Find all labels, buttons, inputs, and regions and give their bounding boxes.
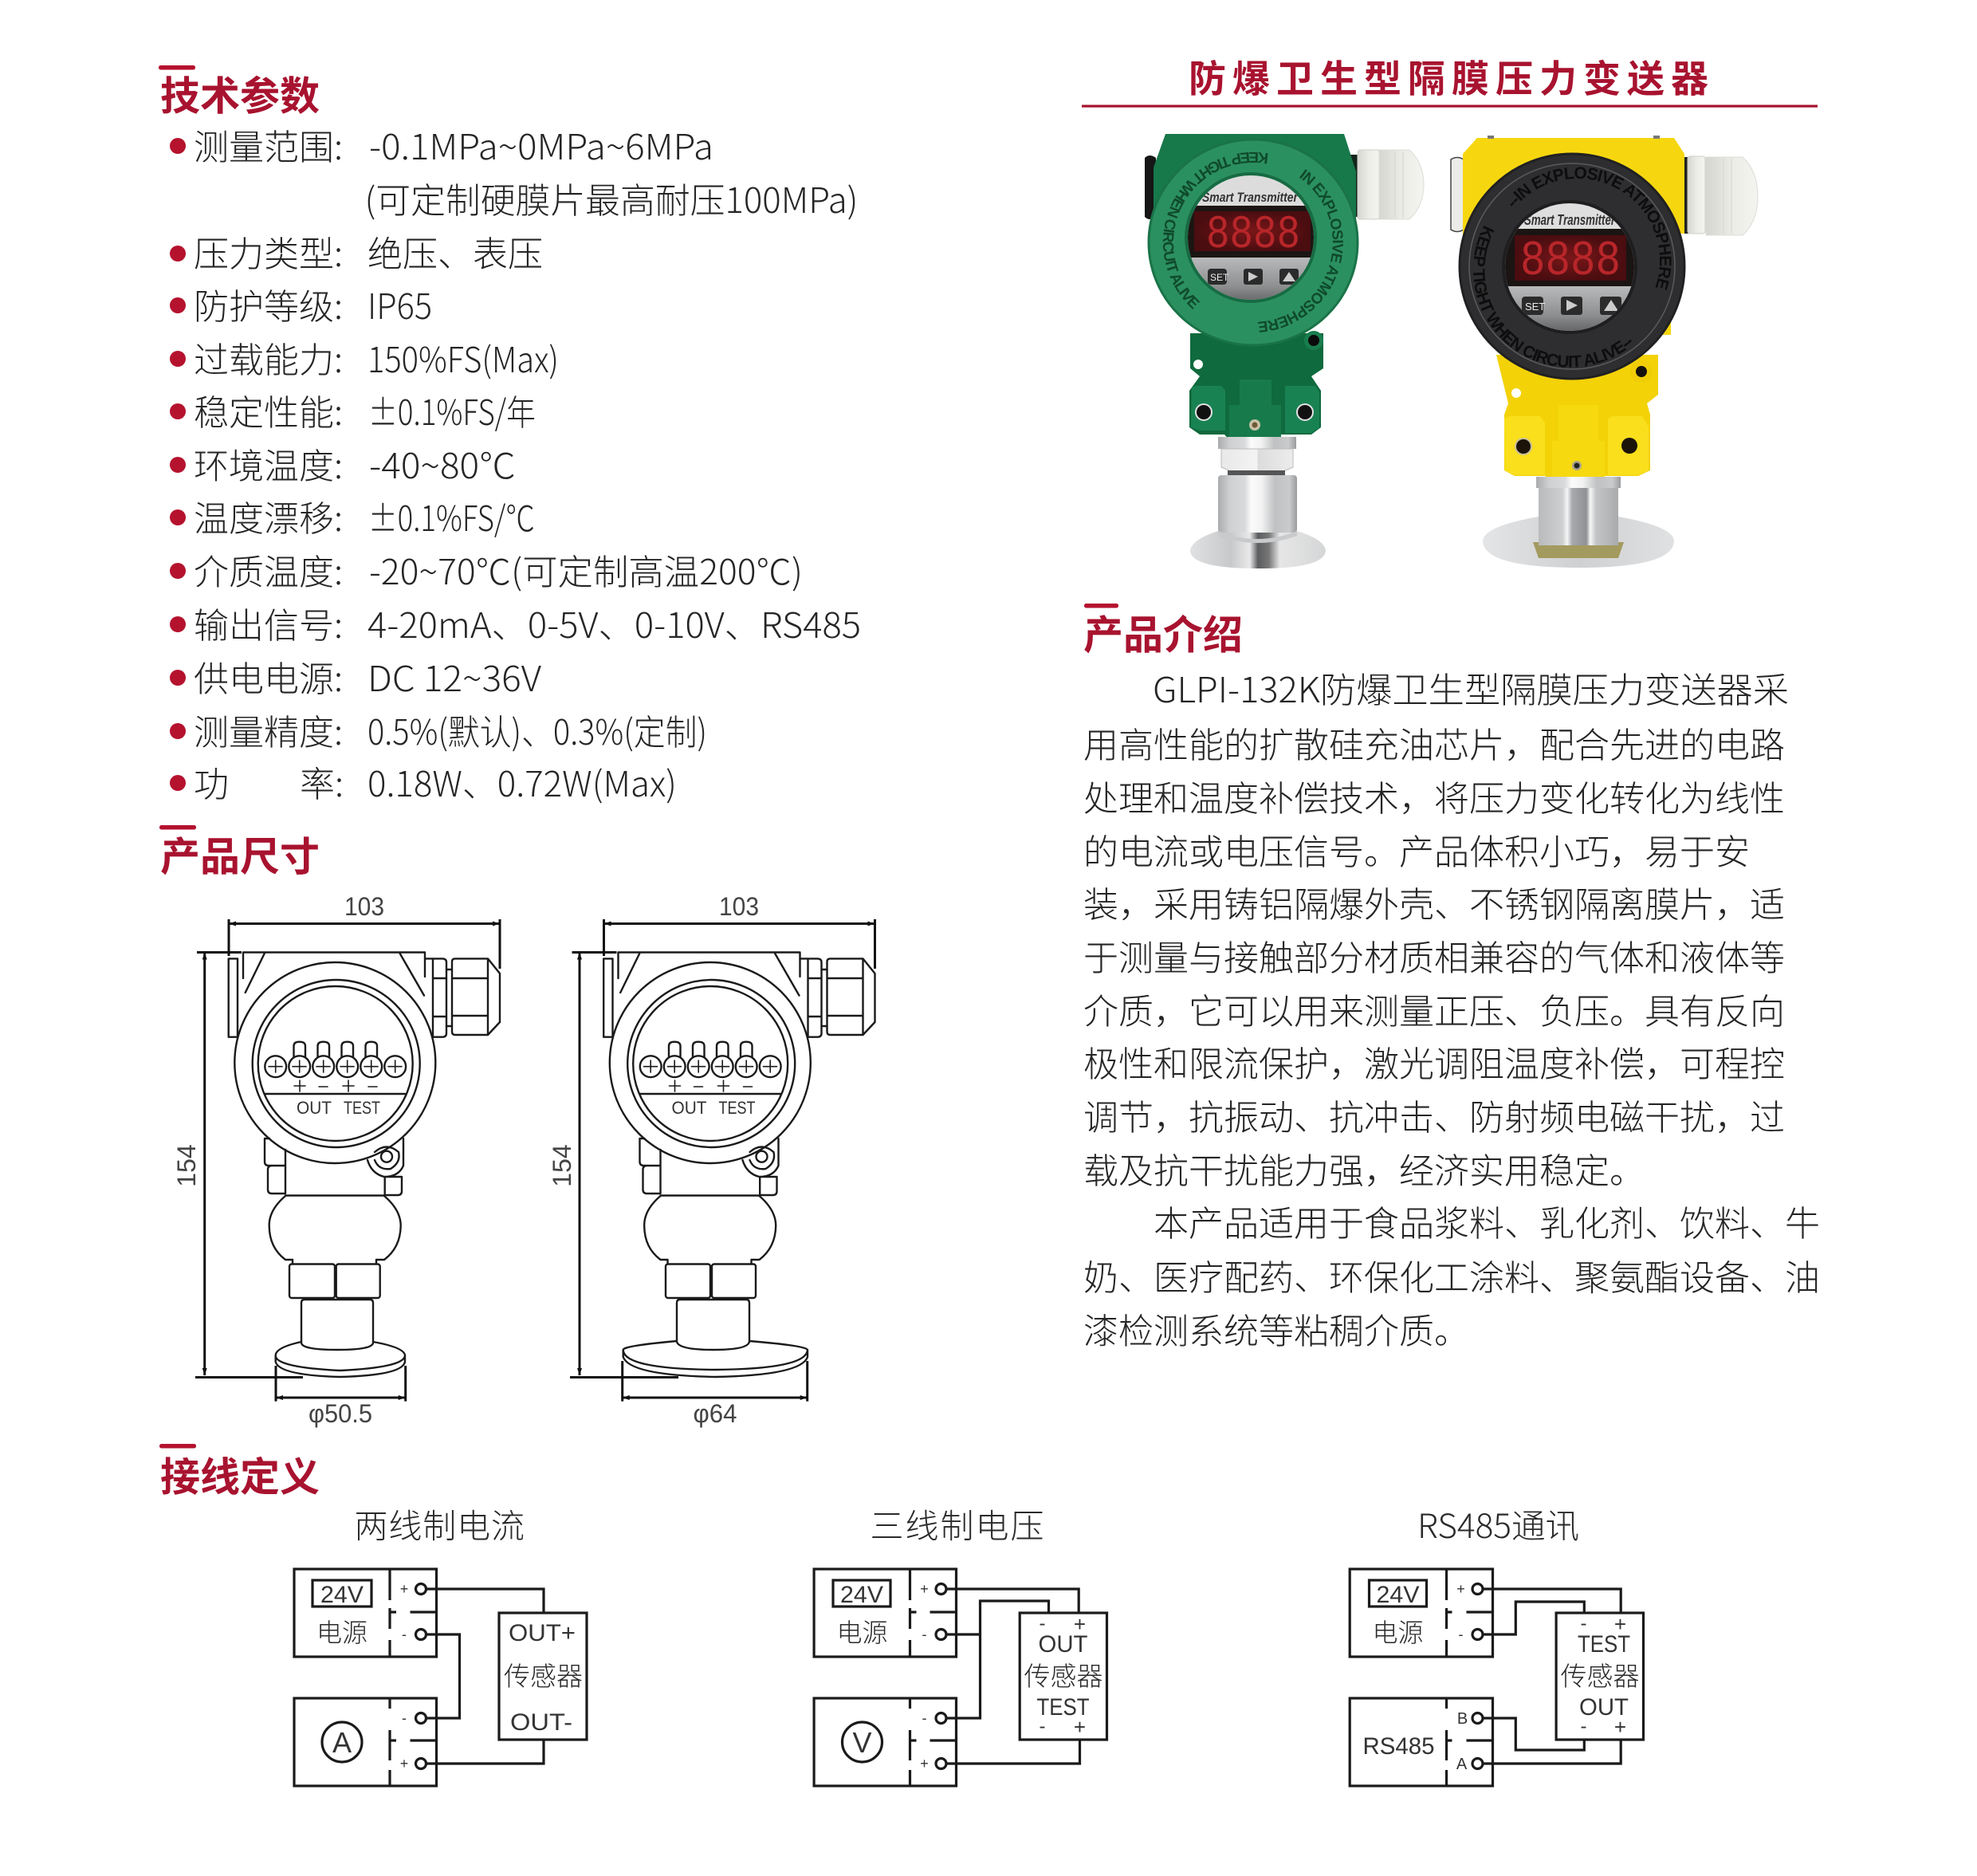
front cover ring bbox=[1460, 154, 1684, 379]
housing bbox=[1154, 134, 1356, 243]
housing outline bbox=[603, 952, 875, 1163]
spec row: 温度漂移 bbox=[170, 490, 535, 541]
sensor block: - bbox=[1580, 1613, 1586, 1634]
spec row: 测量范围 bbox=[170, 119, 858, 223]
power supply block bbox=[814, 1569, 957, 1657]
process connection bbox=[1483, 477, 1674, 568]
spec row: 压力类型 bbox=[170, 226, 543, 277]
voltmeter block: + bbox=[920, 1756, 929, 1772]
ammeter block: A bbox=[332, 1726, 352, 1759]
dimension: height 154: 154 bbox=[548, 1144, 576, 1187]
process connection bbox=[1190, 437, 1326, 568]
panel: product dimensions bbox=[159, 825, 875, 1428]
lower body bbox=[1189, 331, 1323, 440]
spec row: 供电电源: 供电电源: bbox=[194, 651, 343, 702]
spec row: 供电电源: DC 12~36V bbox=[367, 651, 542, 702]
spec row: 过载能力: 过载能力: bbox=[194, 332, 343, 383]
power supply block: + bbox=[400, 1581, 408, 1597]
sensor block: - bbox=[1040, 1613, 1046, 1634]
terminal block bbox=[265, 1042, 406, 1118]
power supply block: 电源 bbox=[316, 1613, 367, 1650]
display window: SET bbox=[1525, 301, 1545, 313]
paragraph: product description: 的电流或电压信号。产品体积小巧，易于安 bbox=[1083, 824, 1750, 875]
power supply block: 24V bbox=[320, 1582, 364, 1608]
spec row: 输出信号: 4-20mA、0-5V、0-10V、RS485 bbox=[367, 597, 861, 648]
spec row: 功率: 功 bbox=[194, 756, 229, 807]
power supply block: + bbox=[920, 1581, 929, 1597]
power supply block: 24V bbox=[840, 1582, 883, 1608]
dimension: flange φ64 bbox=[623, 1361, 808, 1428]
power supply block bbox=[1350, 1569, 1492, 1657]
spec row: 介质温度: 介质温度: bbox=[194, 544, 343, 595]
sensor block bbox=[1020, 1612, 1106, 1740]
voltmeter block bbox=[814, 1698, 957, 1786]
left plug bbox=[1451, 158, 1464, 231]
sensor block: OUT bbox=[1038, 1631, 1087, 1658]
ammeter block: - bbox=[402, 1710, 407, 1726]
spec row: 防护等级 bbox=[170, 278, 432, 329]
dimension: flange φ64: φ64 bbox=[694, 1399, 737, 1428]
terminal block: TEST bbox=[719, 1098, 756, 1118]
power supply block: - bbox=[1459, 1626, 1464, 1642]
photo: green transmitter bbox=[1145, 134, 1424, 568]
dimension: flange φ50.5 bbox=[276, 1366, 406, 1428]
ring lettering: KEEP TIGHT WHEN CIRCUIT ALIVE bbox=[1162, 151, 1268, 309]
spec row: 稳定性能: ±0.1%FS/年 bbox=[368, 384, 536, 435]
spec row: 功率: 0.18W、0.72W(Max) bbox=[367, 756, 677, 807]
dimension: width 103: 103 bbox=[719, 892, 759, 921]
power supply block: 电源 bbox=[1373, 1613, 1424, 1650]
lower body bbox=[1496, 355, 1658, 481]
panel: wiring definitions bbox=[159, 1444, 1644, 1786]
heading: 技术参数: 技术参数 bbox=[160, 65, 320, 122]
wiring diagram: two-wire current bbox=[294, 1500, 587, 1786]
window bezel bbox=[1185, 172, 1317, 303]
spec row: 输出信号 bbox=[170, 597, 861, 648]
spec row: 稳定性能: 稳定性能: bbox=[194, 384, 343, 435]
paragraph: product description: 漆检测系统等粘稠介质。 bbox=[1083, 1303, 1469, 1354]
ring lettering bbox=[1162, 151, 1343, 332]
cable gland bbox=[1347, 150, 1424, 219]
paragraph: product description: 调节，抗振动、抗冲击、防射频电磁干扰，过 bbox=[1083, 1089, 1785, 1140]
spec row: 介质温度 bbox=[170, 544, 803, 595]
ring accent bbox=[1469, 163, 1675, 369]
ring lettering: --IN EXPLOSIVE ATMOSPHERE bbox=[1510, 167, 1671, 290]
heading: 接线定义: 接线定义 bbox=[160, 1445, 320, 1503]
voltmeter block: - bbox=[922, 1710, 926, 1726]
paragraph: product description: GLPI-132K防爆卫生型隔膜压力变送器采 bbox=[1153, 662, 1789, 713]
spec row: 防护等级: IP65 bbox=[367, 278, 432, 329]
diagram title: RS485通讯 bbox=[1417, 1500, 1579, 1548]
wires bbox=[426, 1589, 544, 1764]
power supply block: - bbox=[402, 1626, 407, 1642]
paragraph: product description: 于测量与接触部分材质相兼容的气体和液体等 bbox=[1083, 930, 1785, 981]
power supply block: - bbox=[922, 1626, 926, 1642]
power supply block: 24V bbox=[1376, 1582, 1419, 1608]
dimension: width 103 bbox=[604, 892, 875, 969]
dimension: height 154 bbox=[172, 952, 303, 1378]
photo: yellow transmitter bbox=[1450, 136, 1759, 568]
terminal block: OUT bbox=[671, 1098, 706, 1118]
power supply block: + bbox=[1456, 1581, 1465, 1597]
spec row: 功率 bbox=[170, 756, 677, 807]
dimension: height 154: 154 bbox=[172, 1144, 201, 1187]
heading: 产品介绍: 产品介绍 bbox=[1083, 604, 1243, 661]
sensor block: + bbox=[1074, 1715, 1086, 1739]
spec row: 温度漂移: ±0.1%FS/℃ bbox=[368, 490, 535, 541]
spec row: 功率: 率: bbox=[300, 756, 344, 807]
paragraph: product description: 极性和限流保护，激光调阻温度补偿，可程控 bbox=[1083, 1036, 1785, 1087]
paragraph: product description: 用高性能的扩散硅充油芯片，配合先进的电路 bbox=[1083, 717, 1785, 768]
paragraph: product description: 载及抗干扰能力强，经济实用稳定。 bbox=[1083, 1143, 1645, 1194]
sensor block bbox=[499, 1613, 587, 1740]
spec row: 测量精度: 0.5%(默认)、0.3%(定制) bbox=[367, 704, 707, 755]
sensor block: - bbox=[1040, 1716, 1046, 1737]
paragraph: product description: 奶、医疗配药、环保化工涂料、聚氨酯设备、油 bbox=[1083, 1249, 1820, 1300]
sensor block: + bbox=[1614, 1715, 1626, 1739]
spec row: 温度漂移: 温度漂移: bbox=[194, 490, 343, 541]
spec row: 过载能力: 150%FS(Max) bbox=[367, 332, 559, 383]
dimension: flange φ50.5: φ50.5 bbox=[309, 1399, 372, 1428]
paragraph: product description: 介质，它可以用来测量正压、负压。具有反向 bbox=[1083, 983, 1785, 1034]
spec row: 测量范围: -0.1MPa~0MPa~6MPa bbox=[369, 119, 713, 170]
spec row: 供电电源 bbox=[170, 651, 542, 702]
dimension drawing: φ64 flange bbox=[548, 892, 875, 1428]
wiring diagram: RS485 communication bbox=[1350, 1500, 1644, 1786]
spec row: 测量范围: (可定制硬膜片最高耐压100MPa) bbox=[365, 172, 858, 223]
sensor block: 传感器 bbox=[1024, 1655, 1103, 1693]
lower body and flange bbox=[265, 1139, 405, 1377]
sensor block: + bbox=[1074, 1612, 1086, 1636]
display window: SET bbox=[1210, 272, 1229, 283]
sensor block: TEST bbox=[1036, 1694, 1089, 1721]
dimension: height 154 bbox=[548, 952, 678, 1378]
spec row: 介质温度: -20~70℃(可定制高温200℃) bbox=[369, 544, 803, 595]
RS485 block: B bbox=[1457, 1710, 1468, 1728]
wiring diagram: three-wire voltage bbox=[814, 1500, 1106, 1786]
diagram title: 两线制电流 bbox=[354, 1500, 525, 1548]
RS485 block: A bbox=[1456, 1756, 1468, 1773]
display window: Smart Transmitter bbox=[1202, 190, 1299, 205]
ring lettering: KEEP TIGHT WHEN CIRCUIT ALIVE-- bbox=[1473, 226, 1632, 368]
cable gland bbox=[1682, 156, 1758, 235]
paragraph: product description: 本产品适用于食品浆料、乳化剂、饮料、牛 bbox=[1154, 1195, 1820, 1246]
dimension: width 103 bbox=[229, 892, 500, 969]
spec row: 压力类型: 绝压、表压 bbox=[367, 226, 543, 277]
sensor block: 传感器 bbox=[504, 1655, 583, 1693]
RS485 block bbox=[1350, 1698, 1492, 1786]
panel: technical parameters bbox=[159, 65, 861, 807]
voltmeter block: V bbox=[852, 1726, 872, 1759]
spec row: 输出信号: 输出信号: bbox=[194, 597, 343, 648]
paragraph: product description: 处理和温度补偿技术，将压力变化转化为线性 bbox=[1083, 770, 1785, 821]
ammeter block: + bbox=[400, 1756, 408, 1772]
wires bbox=[946, 1589, 1079, 1764]
ring lettering bbox=[1473, 167, 1671, 368]
spec row: 压力类型: 压力类型: bbox=[194, 226, 343, 277]
sensor block: OUT- bbox=[510, 1709, 572, 1736]
terminal block: TEST bbox=[344, 1098, 380, 1118]
display window bbox=[1188, 175, 1314, 300]
sensor block bbox=[1556, 1612, 1644, 1740]
housing outline bbox=[229, 952, 500, 1163]
terminal block: OUT bbox=[297, 1098, 332, 1118]
paragraph: product description: 装，采用铸铝隔爆外壳、不锈钢隔离膜片，适 bbox=[1083, 876, 1785, 927]
spec row: 测量精度 bbox=[170, 704, 707, 755]
sensor block: + bbox=[1614, 1612, 1626, 1636]
spec row: 测量范围: 测量范围: bbox=[194, 119, 343, 170]
housing bbox=[1463, 136, 1684, 335]
spec row: 环境温度: 环境温度: bbox=[194, 438, 343, 489]
display window: 8888 bbox=[1520, 233, 1621, 289]
power supply block: 电源 bbox=[837, 1613, 888, 1650]
sensor block: OUT+ bbox=[509, 1620, 576, 1646]
spec row: 测量精度: 测量精度: bbox=[194, 704, 343, 755]
display window: Smart Transmitter bbox=[1524, 212, 1616, 228]
display window: 8888 bbox=[1206, 210, 1300, 262]
dimension drawing: φ50.5 clamp bbox=[172, 892, 500, 1428]
RS485 block: RS485 bbox=[1363, 1733, 1435, 1760]
ammeter block bbox=[294, 1698, 437, 1786]
left plug bbox=[1145, 155, 1156, 219]
panel: product introduction bbox=[1083, 604, 1820, 1354]
display window bbox=[1505, 203, 1634, 331]
diagram title: 三线制电压 bbox=[871, 1500, 1044, 1548]
dimension: width 103: 103 bbox=[344, 892, 384, 921]
wires bbox=[1483, 1589, 1621, 1764]
sensor block: OUT bbox=[1579, 1694, 1629, 1721]
window bezel bbox=[1502, 200, 1637, 334]
spec row: 环境温度 bbox=[170, 438, 516, 489]
spec row: 防护等级: 防护等级: bbox=[194, 278, 343, 329]
paragraph: product description bbox=[1083, 662, 1820, 1354]
lower body and flange bbox=[623, 1139, 808, 1377]
spec row: 过载能力 bbox=[170, 332, 559, 383]
title bbox=[1082, 48, 1818, 108]
sensor block: - bbox=[1580, 1716, 1586, 1737]
sensor block: 传感器 bbox=[1561, 1655, 1639, 1693]
title: 防爆卫生型隔膜压力变送器 bbox=[1189, 48, 1708, 104]
terminal block bbox=[639, 1042, 781, 1118]
heading: 产品尺寸: 产品尺寸 bbox=[160, 825, 320, 883]
ring lettering: IN EXPLOSIVE ATMOSPHERE bbox=[1258, 169, 1343, 332]
spec row: 稳定性能 bbox=[170, 384, 536, 435]
sensor block: TEST bbox=[1578, 1631, 1630, 1658]
front cover ring bbox=[1149, 140, 1358, 345]
spec row: 环境温度: -40~80℃ bbox=[369, 438, 516, 489]
power supply block bbox=[294, 1569, 437, 1657]
